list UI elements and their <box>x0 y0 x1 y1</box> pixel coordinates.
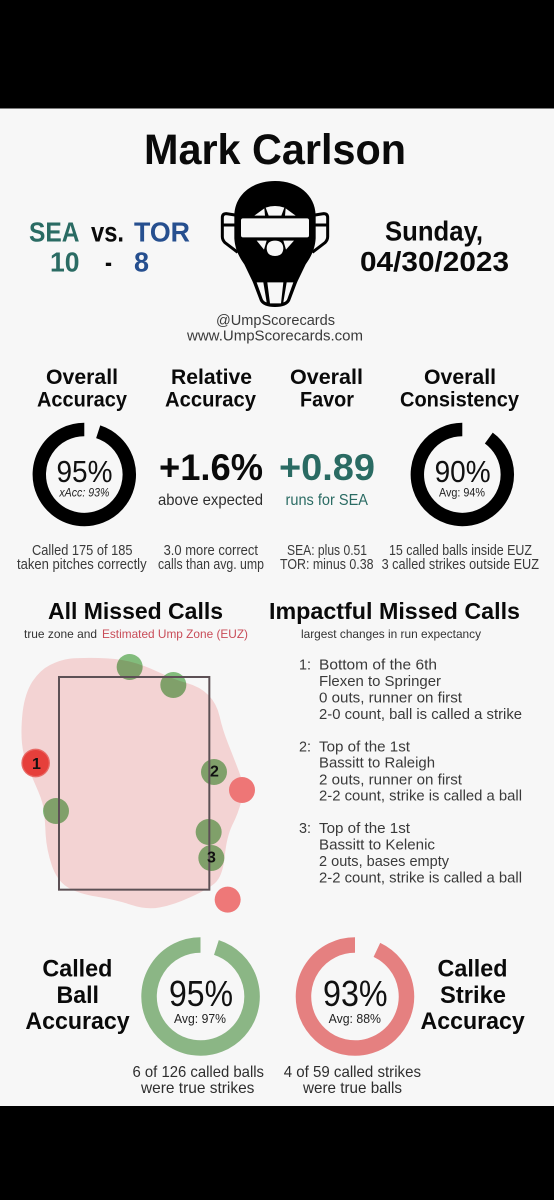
value: 95% <box>169 973 233 1014</box>
average: Avg: 97% <box>174 1011 226 1026</box>
value label: above expected <box>158 492 263 509</box>
caption: were true strikes <box>140 1080 254 1097</box>
panel: impactful missed calls <box>269 598 522 886</box>
average: Avg: 94% <box>439 486 485 500</box>
missed call 2: 2-2 count, strike is called a ball <box>319 789 522 805</box>
game date <box>360 216 509 277</box>
heading: Consistency <box>400 388 519 412</box>
caption: 6 of 126 called balls <box>132 1064 264 1081</box>
missed call 1 <box>299 657 522 723</box>
true strike zone <box>59 677 209 890</box>
average: Avg: 88% <box>329 1011 381 1026</box>
caption: 3.0 more correct <box>164 543 258 559</box>
heading: Accuracy <box>25 1008 130 1035</box>
heading <box>25 956 130 1035</box>
heading: Favor <box>300 388 354 412</box>
expected accuracy: xAcc: 93% <box>59 486 110 500</box>
heading: Relative <box>171 366 252 389</box>
caption <box>132 1064 264 1097</box>
value: +1.6% <box>159 447 263 488</box>
missed call 3: Bassitt to Kelenic <box>319 837 435 853</box>
handle: @UmpScorecards <box>216 313 335 329</box>
heading <box>400 366 519 412</box>
missed call 1: 0 outs, runner on first <box>319 691 462 707</box>
heading: Overall <box>46 366 118 389</box>
missed call 1: 2-0 count, ball is called a strike <box>319 707 522 723</box>
team: TOR: TOR <box>134 216 190 248</box>
icon: umpire mask <box>222 181 328 307</box>
subheading: true zone and <box>24 627 97 641</box>
heading: Ball <box>56 982 99 1009</box>
caption <box>17 543 147 573</box>
heading <box>420 956 525 1035</box>
title: Mark Carlson <box>144 126 406 174</box>
heading <box>165 366 256 412</box>
missed call 3: 2-2 count, strike is called a ball <box>319 870 522 886</box>
score separator: - <box>105 246 112 278</box>
value label: runs for SEA <box>286 492 368 509</box>
subheading: largest changes in run expectancy <box>301 627 481 641</box>
missed call 3: 2 outs, bases empty <box>319 854 450 870</box>
heading <box>290 366 363 412</box>
ring chart: 95% <box>39 430 129 520</box>
missed call 1: Bottom of the 6th <box>319 657 437 673</box>
caption: TOR: minus 0.38 <box>280 557 374 573</box>
missed call 1: Flexen to Springer <box>319 674 441 690</box>
website: www.UmpScorecards.com <box>186 328 363 344</box>
heading: Accuracy <box>165 388 256 412</box>
ring chart: 95% <box>149 945 252 1048</box>
ring chart: 90% <box>417 430 507 520</box>
caption <box>284 1064 421 1097</box>
missed call 3: Top of the 1st <box>319 821 410 837</box>
caption: were true balls <box>302 1080 402 1097</box>
heading <box>37 366 127 412</box>
panel: overall favor <box>279 366 375 573</box>
caption <box>280 543 374 573</box>
panel: overall accuracy <box>17 366 147 573</box>
value: 95% <box>56 454 112 489</box>
panel: relative accuracy <box>158 366 264 573</box>
missed balls called strikes (green) <box>43 654 227 871</box>
caption: calls than avg. ump <box>158 557 264 573</box>
heading: Accuracy <box>420 1008 525 1035</box>
heading: Overall <box>424 366 496 389</box>
caption: SEA: plus 0.51 <box>287 543 367 559</box>
matchup and score <box>29 216 190 278</box>
marker labels: 1 <box>32 756 41 773</box>
heading: All Missed Calls <box>48 598 223 624</box>
panel: called ball accuracy <box>25 945 264 1097</box>
heading: Overall <box>290 366 363 389</box>
marker labels: 2 <box>210 764 219 781</box>
missed call 2: 2: <box>299 739 311 755</box>
value: +0.89 <box>279 447 375 488</box>
heading: Accuracy <box>37 388 127 412</box>
heading: Impactful Missed Calls <box>269 598 520 624</box>
score: SEA: 10 <box>50 246 80 278</box>
caption <box>158 543 264 573</box>
missed call 2 <box>299 739 522 805</box>
panel: all missed calls <box>21 598 255 913</box>
subheading <box>24 627 248 641</box>
marker labels <box>32 756 219 867</box>
subheading: Estimated Ump Zone (EUZ) <box>102 627 248 641</box>
ring chart: 93% <box>303 945 406 1048</box>
missed call 3 <box>299 821 522 886</box>
heading: Called <box>42 956 112 983</box>
weekday: Sunday, <box>385 216 483 246</box>
missed call 2: Top of the 1st <box>319 739 410 755</box>
team: SEA: SEA <box>29 216 80 248</box>
caption: 4 of 59 called strikes <box>284 1064 421 1081</box>
caption <box>382 543 539 573</box>
missed call 2: Bassitt to Raleigh <box>319 756 435 772</box>
score: TOR: 8 <box>134 246 149 278</box>
estimated ump zone <box>21 658 243 908</box>
strike zone plot <box>21 654 255 913</box>
versus label: vs. <box>91 216 124 248</box>
panel: overall consistency <box>382 366 539 573</box>
heading: Strike <box>440 982 506 1009</box>
value: 93% <box>323 973 388 1014</box>
missed strikes called balls (red) <box>21 749 255 913</box>
date: 04/30/2023 <box>360 246 509 277</box>
missed call 3: 3: <box>299 821 311 837</box>
caption: taken pitches correctly <box>17 557 147 573</box>
attribution <box>186 313 363 344</box>
marker labels: 3 <box>207 850 216 867</box>
caption: Called 175 of 185 <box>32 543 132 559</box>
missed call 2: 2 outs, runner on first <box>319 772 462 788</box>
missed call 1: 1: <box>299 657 311 673</box>
heading: Called <box>438 956 508 983</box>
panel: called strike accuracy <box>284 945 525 1097</box>
caption: 15 called balls inside EUZ <box>389 543 532 559</box>
value: 90% <box>435 454 491 489</box>
